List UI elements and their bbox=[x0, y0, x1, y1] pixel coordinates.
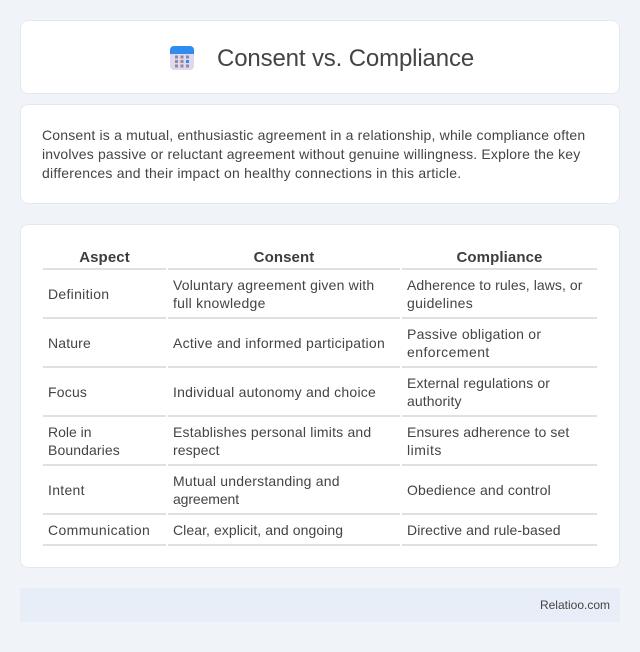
comparison table: authority bbox=[407, 393, 462, 409]
comparison table: full knowledge bbox=[173, 295, 266, 311]
comparison table: agreement bbox=[173, 491, 239, 507]
comparison table: guidelines bbox=[407, 295, 473, 311]
comparison table: Individual autonomy and choice bbox=[173, 384, 376, 400]
comparison table: respect bbox=[173, 442, 220, 458]
comparison table: External regulations or bbox=[407, 375, 550, 391]
comparison table: Ensures adherence to set bbox=[407, 424, 569, 440]
comparison table: Adherence to rules, laws, or bbox=[407, 277, 582, 293]
intro text: Consent is a mutual, enthusiastic agreement in a relationship, while compliance often bbox=[42, 127, 585, 143]
comparison table: limits bbox=[407, 442, 442, 458]
comparison table: Mutual understanding and bbox=[173, 473, 340, 489]
comparison table: Communication bbox=[48, 522, 150, 538]
comparison table: Intent bbox=[48, 482, 85, 498]
row: intent bbox=[48, 473, 551, 507]
comparison table: Clear, explicit, and ongoing bbox=[173, 522, 343, 538]
column headers bbox=[79, 249, 543, 266]
panel: introduction bbox=[20, 104, 620, 204]
comparison table: Focus bbox=[48, 384, 87, 400]
comparison table: Consent bbox=[254, 249, 314, 266]
comparison table: Voluntary agreement given with bbox=[173, 277, 374, 293]
row: communication bbox=[48, 522, 561, 538]
comparison table: Establishes personal limits and bbox=[173, 424, 371, 440]
footer bar bbox=[20, 588, 620, 622]
comparison table: Aspect bbox=[79, 249, 130, 266]
row: focus bbox=[48, 375, 550, 409]
row lines bbox=[43, 268, 597, 546]
icon: calendar bbox=[170, 46, 194, 70]
intro text: involves passive or reluctant agreement without genuine willingness. Explore the key bbox=[42, 146, 580, 162]
comparison table: Compliance bbox=[456, 249, 543, 266]
comparison table: Obedience and control bbox=[407, 482, 551, 498]
comparison table: Boundaries bbox=[48, 442, 120, 458]
row: nature bbox=[48, 326, 541, 360]
intro text: differences and their impact on healthy connections in this article. bbox=[42, 165, 461, 181]
comparison table: Role in bbox=[48, 424, 92, 440]
comparison table: enforcement bbox=[407, 344, 490, 360]
row: role in boundaries bbox=[48, 424, 570, 458]
comparison table: Passive obligation or bbox=[407, 326, 541, 342]
comparison table: Active and informed participation bbox=[173, 335, 385, 351]
intro text bbox=[42, 127, 585, 181]
title: Consent vs. Compliance bbox=[217, 45, 474, 72]
comparison table: Definition bbox=[48, 286, 109, 302]
row: definition bbox=[48, 277, 582, 311]
footer credit: Relatioo.com bbox=[540, 598, 610, 612]
panel: title card bbox=[20, 20, 620, 94]
panel: comparison table bbox=[20, 224, 620, 568]
comparison table: Directive and rule-based bbox=[407, 522, 561, 538]
comparison table: Nature bbox=[48, 335, 91, 351]
